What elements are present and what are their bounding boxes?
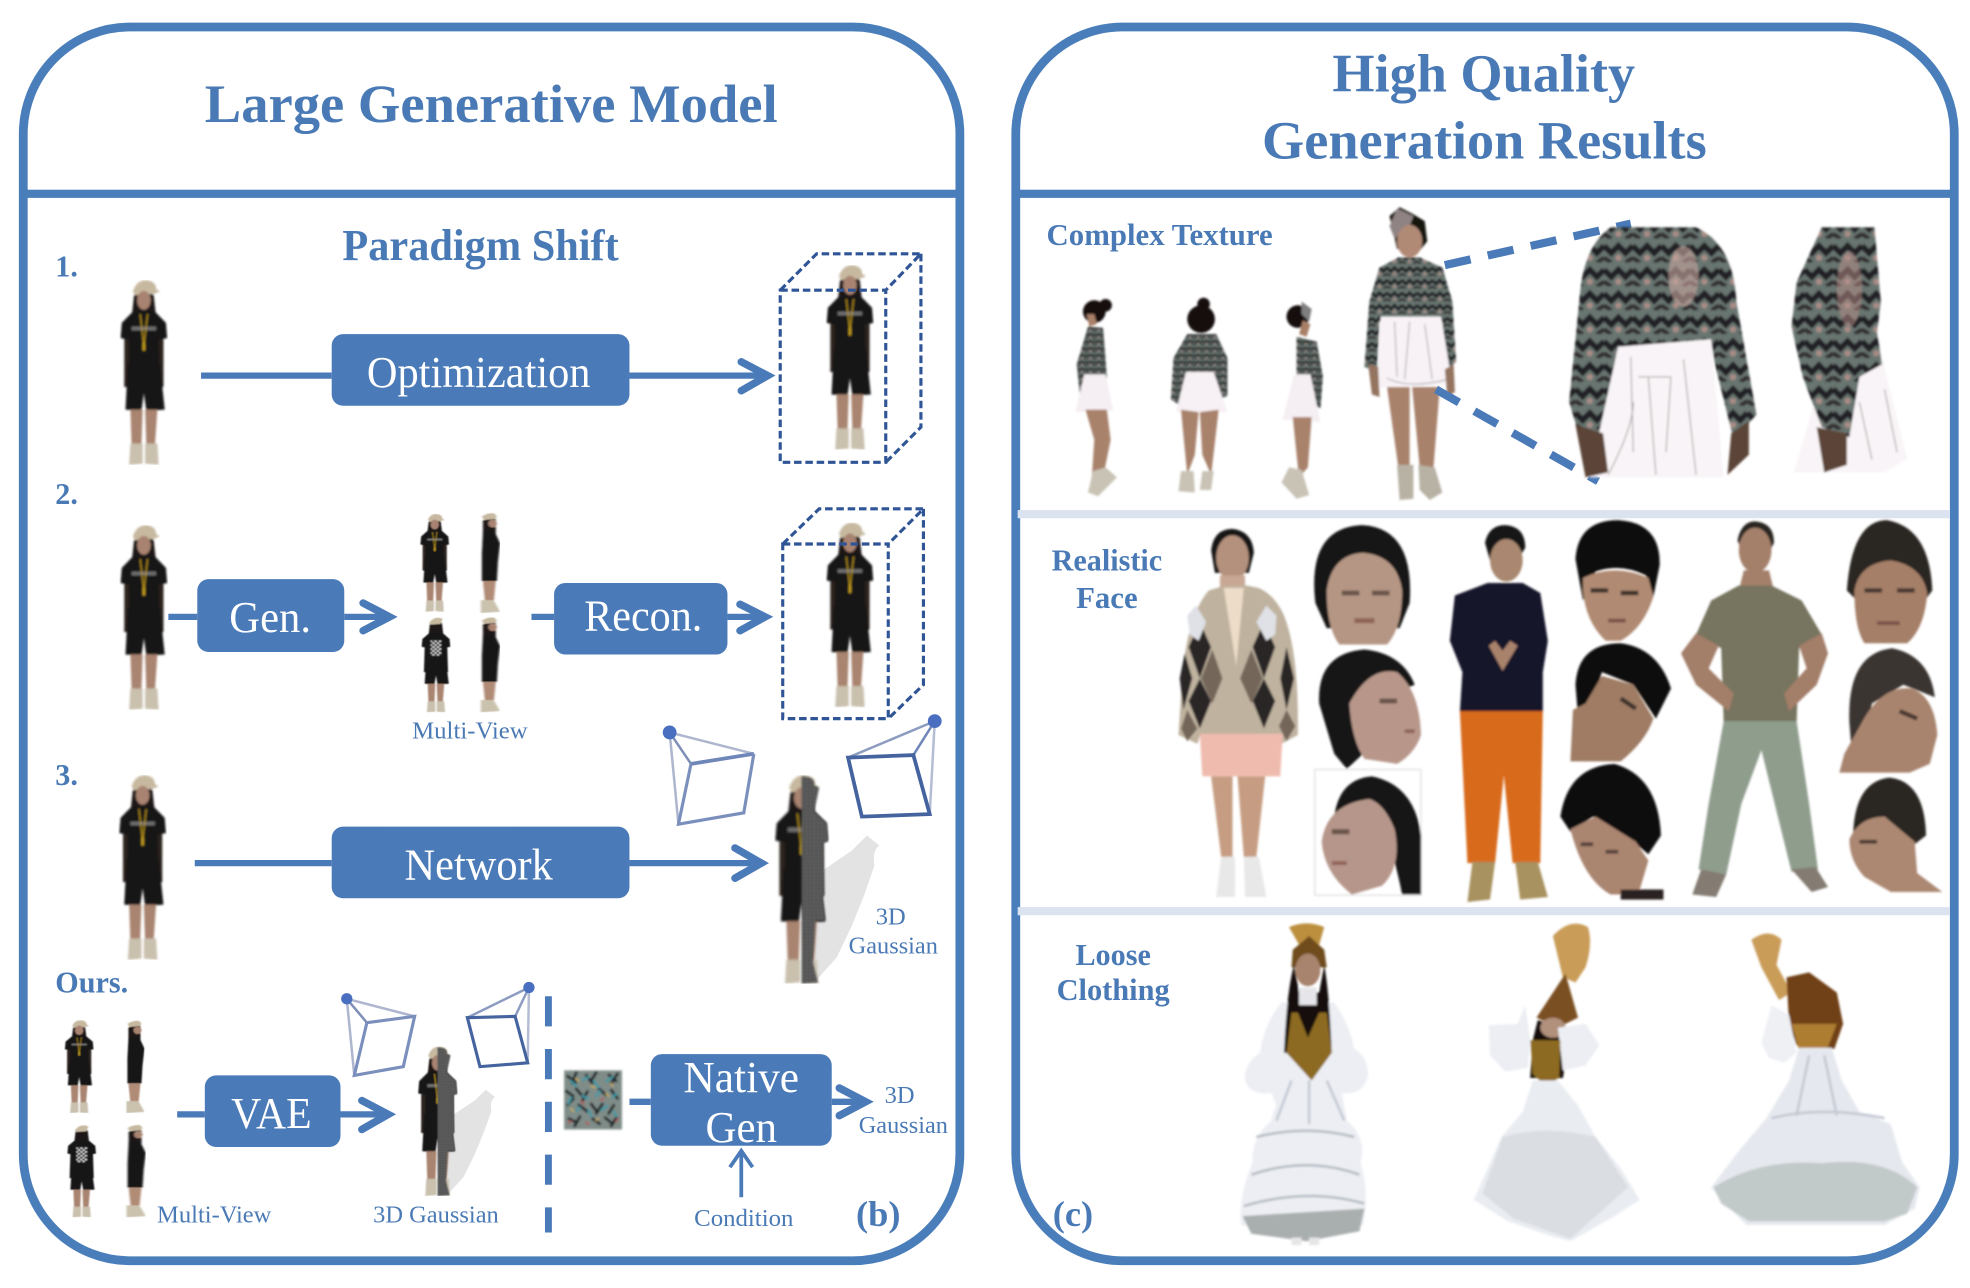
row 1: optimization <box>55 249 921 465</box>
faces: man orange trousers <box>1560 520 1671 900</box>
box: gen: Gen. <box>229 593 311 642</box>
heading: loose clothing: Clothing <box>1057 973 1170 1007</box>
heading: realistic face: Face <box>1076 581 1138 615</box>
figure: back view <box>1171 298 1227 492</box>
figure: input person <box>119 775 166 960</box>
figure: optimized person in dashed cube <box>780 254 921 462</box>
figure: dress back <box>1711 933 1920 1225</box>
heading: loose clothing: Loose <box>1075 938 1151 972</box>
figure: side view right <box>1281 302 1323 499</box>
caption: 3D gaussian <box>859 1082 948 1139</box>
caption: 3D gaussian: 3D <box>876 904 906 931</box>
box: network: Network <box>405 840 553 889</box>
arrow: condition up <box>730 1151 753 1197</box>
box: gen <box>197 579 344 652</box>
heading: paradigm shift: Paradigm Shift <box>342 221 619 270</box>
figure: input person <box>121 280 167 465</box>
figure: main standing person <box>1364 207 1456 500</box>
section: complex texture <box>1047 207 1907 500</box>
box: native gen: Gen <box>705 1103 777 1152</box>
panel: high quality generation results <box>1015 27 1955 1261</box>
heading: loose clothing <box>1057 938 1170 1007</box>
box: optimization <box>332 334 629 406</box>
caption: condition: Condition <box>694 1205 793 1232</box>
figures: multi-view <box>65 1020 146 1217</box>
callout: zoom dashed lines <box>1436 224 1631 481</box>
figure: reconstructed person in dashed cube <box>783 509 923 719</box>
label: 3.: 3. <box>55 758 78 792</box>
figure: woman cardigan <box>1178 529 1298 897</box>
arrow: recon <box>531 604 765 631</box>
box: optimization: Optimization <box>367 348 591 397</box>
icon: camera right <box>848 714 942 817</box>
arrow: input to output <box>201 362 768 391</box>
figure: dress tilted <box>1474 924 1640 1241</box>
title: large generative model: Large Generative Model <box>205 74 778 134</box>
icon: camera left <box>341 993 415 1075</box>
icon: latent noise tile <box>564 1070 622 1129</box>
row 3: network <box>55 714 942 984</box>
faces: woman <box>1314 525 1421 895</box>
title: high quality generation results: Generation Results <box>1262 110 1707 170</box>
label: 2.: 2. <box>55 477 78 511</box>
arrow: native gen <box>629 1088 866 1116</box>
figure: side view left <box>1075 299 1117 496</box>
caption: 3D gaussian: 3D Gaussian <box>373 1201 499 1228</box>
title: high quality generation results: High Quality <box>1332 44 1635 104</box>
figure: 3D gaussian person <box>775 775 879 984</box>
caption: 3D gaussian: 3D <box>885 1082 915 1109</box>
box: recon <box>554 583 727 655</box>
caption: multi-view: Multi-View <box>157 1201 272 1228</box>
panel: large generative model <box>23 27 960 1261</box>
figure: dress front <box>1241 923 1368 1245</box>
heading: realistic face <box>1052 543 1162 615</box>
faces: man olive shirt <box>1839 520 1942 892</box>
icon: camera right <box>467 982 535 1067</box>
arrow: gen <box>168 603 389 631</box>
heading: complex texture: Complex Texture <box>1047 218 1273 252</box>
box: vae: VAE <box>231 1089 312 1138</box>
figure: input person <box>121 525 167 710</box>
row: ours <box>55 966 948 1234</box>
box: recon: Recon. <box>584 592 702 641</box>
caption: 3D gaussian <box>849 904 938 960</box>
caption: 3D gaussian: Gaussian <box>849 933 938 960</box>
crop: blouse zoom side <box>1792 227 1907 472</box>
figures: multi-view <box>420 513 500 712</box>
label: ours: Ours. <box>55 966 128 1000</box>
box: native gen <box>651 1053 832 1152</box>
caption: multi-view: Multi-View <box>412 718 528 745</box>
divider: dashed vertical <box>546 996 551 1232</box>
row 2: generation then reconstruction <box>55 477 923 745</box>
label: (b): (b) <box>856 1194 900 1234</box>
caption: 3D gaussian: Gaussian <box>859 1112 948 1139</box>
box: network <box>332 827 629 898</box>
section: loose clothing <box>1057 923 1920 1245</box>
section: realistic face <box>1052 520 1942 902</box>
crop: blouse zoom front <box>1569 227 1756 477</box>
heading: realistic face: Realistic <box>1052 543 1162 577</box>
box: native gen: Native <box>683 1053 799 1102</box>
figure: man olive shirt <box>1681 521 1828 897</box>
figure: 3D gaussian person <box>418 1047 495 1196</box>
arrow: vae <box>177 1101 388 1129</box>
arrow: network <box>195 848 761 878</box>
title: high quality generation results <box>1262 44 1707 170</box>
label: 1.: 1. <box>55 249 78 283</box>
figure: man orange trousers <box>1450 525 1548 902</box>
icon: camera left <box>663 726 754 824</box>
box: vae <box>205 1075 340 1147</box>
label: (c): (c) <box>1053 1194 1093 1234</box>
